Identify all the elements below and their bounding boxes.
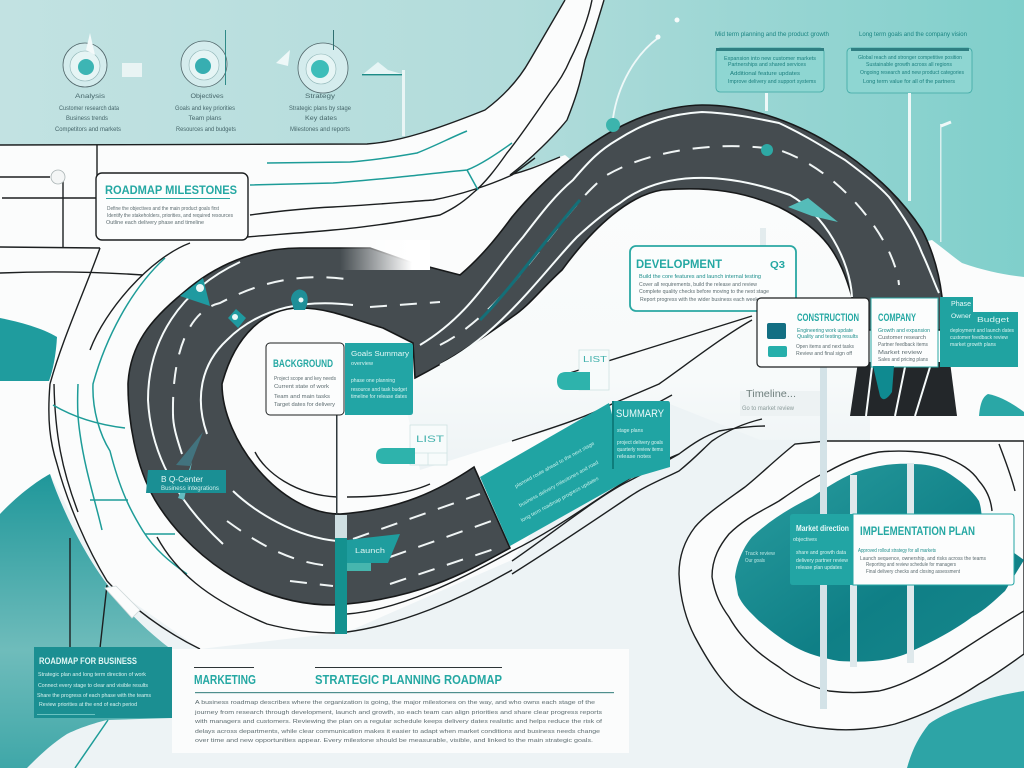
- lamp post top left: [362, 62, 405, 136]
- panel: top right notes 2: Sustainable growth across all regions: [866, 62, 953, 68]
- panel: top right notes 1: [715, 32, 829, 92]
- panel: bottom left summary: Review priorities at the end of each period: [39, 702, 137, 708]
- sign: center left background: phase one planning: [351, 378, 395, 384]
- text: target captions: Strategic plans by stage: [289, 106, 352, 112]
- sign group: right three panels: customer feedback review: [950, 335, 1008, 341]
- sign group: right three panels: deployment and launch dates: [950, 328, 1014, 334]
- text: target captions: Customer research data: [59, 106, 120, 112]
- sign group: right three panels: market growth plans: [950, 342, 996, 348]
- label: left road marker: B Q-Center: [161, 475, 203, 484]
- sign: center right development: Report progress with the wider business each week: [640, 297, 759, 303]
- caption: right of road: Timeline...: [746, 389, 796, 400]
- panel: bottom text block: [172, 649, 629, 753]
- text: target captions: Team plans: [188, 116, 222, 122]
- sign: bottom right: share and growth data: [796, 550, 846, 556]
- small grid sign 1: LIST: [416, 434, 445, 444]
- panel: top right notes 2: Long term value for all of the partners: [863, 79, 956, 85]
- text: target captions: Analysis: [75, 94, 105, 100]
- panel: bottom left summary: Strategic plan and long term direction of work: [38, 672, 147, 678]
- sign: bottom right: delivery partner review: [796, 558, 848, 564]
- panel: bottom text block: A business roadmap describes where the organization is going, the major milestones on the way, and who owns each stage of the: [195, 700, 595, 706]
- sign: center right development: Q3: [770, 260, 785, 271]
- flag label on pole: Launch: [355, 548, 385, 555]
- sign group: right three panels: Review and final sign off: [796, 351, 853, 357]
- sign: center left background: Team and main tasks: [274, 394, 331, 400]
- panel: bottom left summary: ROADMAP FOR BUSINESS: [39, 656, 137, 666]
- sign group: right three panels: Budget: [977, 317, 1009, 324]
- icon: target 3: [276, 30, 348, 93]
- sign: center right development: DEVELOPMENT: [636, 257, 723, 271]
- panel: top right notes 1: Mid term planning and the product growth: [715, 32, 829, 38]
- sign: center right development: Complete quality checks before moving to the next stage: [639, 289, 769, 295]
- poles in the pool: [850, 463, 914, 667]
- sign: bottom right: Reporting and review schedule for managers: [866, 562, 956, 568]
- text: target captions: Strategy: [305, 94, 335, 100]
- icon: target 1: [63, 33, 142, 87]
- sign group: right three panels: Growth and expansion: [878, 328, 930, 334]
- icon: target 2: [181, 30, 227, 87]
- label: left road marker: [146, 470, 226, 493]
- road: lower strip behind signs: [850, 362, 957, 416]
- sign: bottom right: release plan updates: [796, 565, 842, 571]
- teal blob: lower right: [907, 691, 1024, 768]
- road: main S-curve: [128, 105, 942, 605]
- sign group: right three panels: Market review: [878, 350, 923, 356]
- panel: top right notes 2: Long term goals and the company vision: [859, 32, 967, 38]
- text: target captions: Milestones and reports: [290, 127, 350, 133]
- sign: diagonal section label: SUMMARY: [616, 408, 665, 420]
- pins on the road: [176, 118, 894, 500]
- sign: bottom right: objectives: [793, 537, 818, 543]
- main pole: [335, 360, 827, 709]
- teal section text: business delivery milestones and road: [518, 460, 600, 509]
- teal road section: [480, 403, 629, 546]
- posts and connector: [613, 18, 951, 242]
- panel: top right notes 1: Partnerships and shared services: [728, 62, 807, 68]
- panel: bottom text block: with managers and customers. Reviewing the plan on a regular schedule keeps delivery dates realistic and helps reduce the risk of: [195, 719, 603, 725]
- sign: top left milestones: Define the objectives and the main product goals first: [107, 206, 220, 212]
- sign: diagonal section label: release notes: [617, 454, 652, 460]
- marker on top left post: [51, 170, 65, 184]
- sign: center right development: [630, 228, 796, 311]
- panel: top right notes 2: Ongoing research and new product categories: [860, 70, 964, 76]
- text: target captions: Goals and key priorities: [175, 106, 235, 112]
- sign: diagonal section label: quarterly review items: [617, 447, 663, 453]
- sign: diagonal section label: [612, 401, 670, 479]
- sign: center left background: Project scope and key needs: [274, 376, 336, 382]
- panel: bottom text block: journey from research through development, launch and growth, so each team can align priorities and share clear progress reports: [194, 710, 603, 716]
- teal area: lower left: [0, 474, 172, 768]
- background sky: [0, 0, 1024, 300]
- sign: bottom right: [745, 514, 1014, 585]
- flag label on pole: [347, 534, 400, 571]
- sign group: right three panels: Engineering work update: [797, 328, 853, 334]
- panel: bottom text block: delays across departments, while clear communication makes it easier to adapt when market conditions and business needs change: [195, 729, 600, 735]
- sign: bottom right: Launch sequence, ownership, and risks across the teams: [860, 556, 986, 562]
- lane markings: [148, 112, 939, 586]
- panel: top right notes 1: Additional feature updates: [730, 71, 801, 77]
- sign: center left background: Target dates for delivery: [274, 402, 336, 408]
- sign: center left background: Goals Summary: [351, 351, 410, 358]
- sign: center left background: overview: [351, 361, 373, 367]
- sign: bottom right: IMPLEMENTATION PLAN: [860, 524, 975, 538]
- sign: bottom right: Approved rollout strategy for all markets: [858, 548, 936, 554]
- teal section text: long term roadmap progress updates: [520, 476, 600, 524]
- sign: center left background: BACKGROUND: [273, 358, 333, 370]
- text: target captions: Competitors and markets: [55, 127, 121, 133]
- teal blob: left edge: [0, 318, 57, 381]
- sign group: right three panels: [757, 297, 1018, 367]
- sign: top left milestones: Identify the stakeholders, priorities, and required resources: [107, 213, 233, 219]
- panel: top right notes 1: Expansion into new customer markets: [724, 56, 817, 62]
- sign: bottom right: Market direction: [796, 524, 849, 533]
- sign group: right three panels: Sales and pricing plans: [878, 357, 928, 363]
- caption: right of road: [742, 389, 796, 412]
- panel: bottom left summary: [34, 647, 172, 718]
- sign: diagonal section label: stage plans: [617, 428, 644, 434]
- sign group: right three panels: COMPANY: [878, 312, 916, 324]
- text: target captions: Key dates: [305, 116, 337, 122]
- sign group: right three panels: Quality and testing results: [797, 334, 859, 340]
- panel: top right notes 2: [847, 32, 972, 93]
- text: target captions: Resources and budgets: [176, 127, 236, 133]
- sign: center right development: Build the core features and launch internal testing: [639, 274, 761, 280]
- label: left road marker: Business integrations: [161, 486, 219, 492]
- text: target captions: [55, 94, 352, 133]
- sign group: right three panels: Partner feedback items: [878, 342, 928, 348]
- panel: bottom text block: STRATEGIC PLANNING ROADMAP: [315, 672, 502, 687]
- sign: bottom right: Our goals: [745, 558, 765, 564]
- sign: center left background: timeline for release dates: [351, 394, 407, 400]
- text: target captions: Business trends: [66, 116, 108, 122]
- sign: top left milestones: Outline each delivery phase and timeline: [106, 220, 204, 226]
- sign: top left milestones: [96, 173, 248, 240]
- sign: center left background: resource and task budget: [351, 387, 408, 393]
- background ground: [0, 278, 1024, 768]
- sign: bottom right: Track review: [745, 551, 775, 557]
- panel: top right notes 2: Global reach and stronger competitive position: [858, 55, 962, 61]
- sign group: right three panels: Open items and next tasks: [796, 344, 854, 350]
- teal blob: right edge: [979, 394, 1024, 416]
- panel: bottom text block: over time and new opportunities appear. Every milestone should be measurable, visible, and linked to the main strategic goals.: [195, 738, 593, 744]
- sign: diagonal section label: project delivery goals: [617, 440, 663, 446]
- sign group: right three panels: Owner: [951, 314, 971, 320]
- small grid sign 2: [557, 350, 609, 390]
- teal section text: planned route ahead to the next stage: [514, 441, 596, 490]
- sign: top left milestones: ROADMAP MILESTONES: [105, 183, 237, 197]
- small grid sign 2: LIST: [583, 355, 607, 364]
- sign group: right three panels: Phase: [951, 301, 971, 308]
- sign group: right three panels: Customer research: [878, 335, 926, 341]
- left road curves: [49, 243, 335, 768]
- sign group: right three panels: CONSTRUCTION: [797, 312, 859, 324]
- sign: center left background: Current state of work: [274, 384, 330, 390]
- small grid sign 1: [376, 425, 447, 465]
- text: target captions: Objectives: [190, 94, 224, 100]
- panel: bottom text block: MARKETING: [194, 672, 256, 687]
- sign: center right development: Cover all requirements, build the release and review: [639, 282, 757, 288]
- upper road band lines: [0, 0, 604, 275]
- panel: bottom left summary: Connect every stage to clear and visible results: [38, 683, 149, 689]
- panel: bottom left summary: Share the progress of each phase with the teams: [37, 693, 152, 699]
- sign: bottom right: Final delivery checks and closing assessment: [866, 569, 961, 575]
- sign: center left background: [266, 343, 413, 415]
- diagonal road with teal section: [255, 316, 765, 632]
- road loop with teal pool: [679, 441, 1024, 730]
- caption: right of road: Go to market review: [742, 406, 795, 412]
- teal section text: [514, 441, 600, 524]
- panel: top right notes 1: Improve delivery and support systems: [728, 79, 817, 85]
